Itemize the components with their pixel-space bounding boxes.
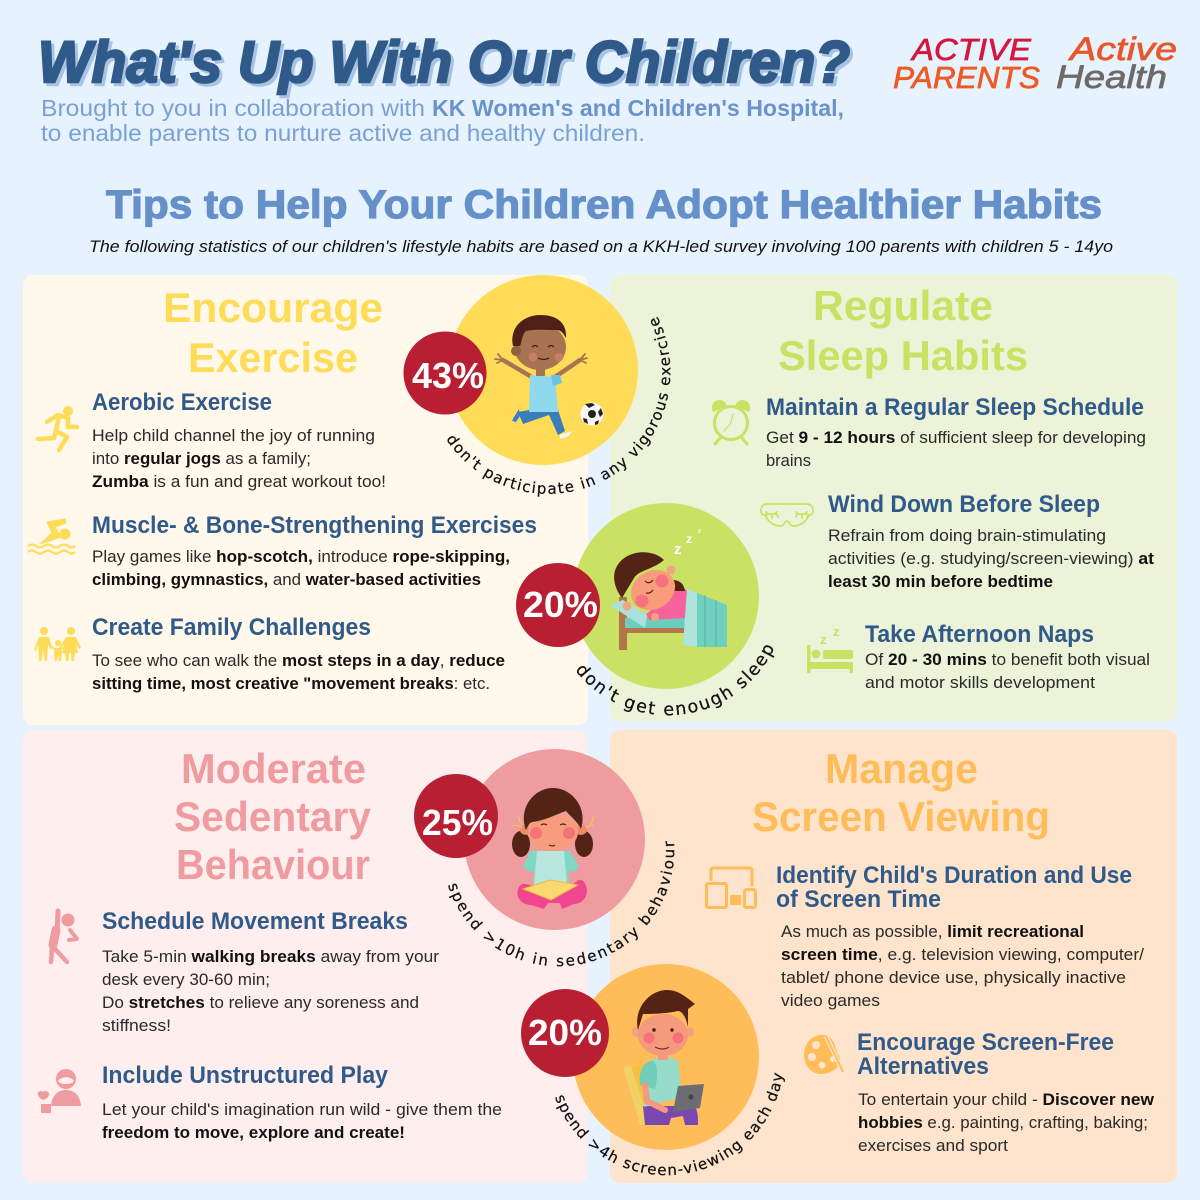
icon: bed: z: [833, 624, 840, 639]
curved caption: sedentary: spend >10h in sedentary behaviour: [448, 841, 674, 966]
tip: screen-free alternatives: Alternatives: [857, 1053, 989, 1080]
logo: Active Parents: ACTIVE: [910, 32, 1031, 67]
tip: afternoon naps: [865, 621, 1150, 692]
icon: z's: z: [698, 529, 701, 535]
stat: sleep: [516, 503, 774, 716]
icon: stretching person: [51, 911, 77, 962]
tip: movement breaks: desk every 30-60 min;: [102, 971, 270, 989]
tip: muscle and bone strengthening: [92, 512, 537, 589]
icon: bed: [807, 624, 853, 673]
tip: screen-free alternatives: Encourage Screen-Free: [857, 1029, 1114, 1056]
title: What's Up With Our Children?: [41, 33, 853, 98]
tip: sleep schedule: brains: [766, 452, 811, 470]
tip: screen-free alternatives: To entertain your child - Discover new: [858, 1091, 1154, 1109]
tip: afternoon naps: and motor skills development: [865, 674, 1095, 692]
tip: wind down: Wind Down Before Sleep: [828, 491, 1100, 518]
illustration: girl reading: [512, 788, 594, 909]
tip: screen-free alternatives: exercises and sport: [858, 1137, 1008, 1155]
heading: encourage exercise: Encourage: [163, 284, 383, 331]
tip: screen-free alternatives: hobbies e.g. painting, crafting, baking;: [858, 1114, 1148, 1132]
logo: Active Health: [1056, 31, 1177, 95]
tip: duration of screen time: of Screen Time: [776, 886, 941, 913]
tip: duration of screen time: screen time , e.g. television viewing, computer/: [781, 946, 1144, 964]
illustration: girl sleeping: [610, 529, 727, 650]
tip: duration of screen time: As much as possible, limit recreational: [781, 923, 1084, 941]
tip: movement breaks: Take 5-min walking breaks away from your: [102, 948, 440, 966]
icon: z's: z: [674, 541, 682, 558]
heading: moderate sedentary behaviour: Behaviour: [176, 841, 370, 888]
heading: encourage exercise: [163, 284, 383, 381]
badge: 20% sleep: [516, 563, 600, 647]
tip: family challenges: Create Family Challenges: [92, 614, 371, 641]
icon: alarm clock: [713, 401, 749, 444]
tip: aerobic exercise: into regular jogs as a family;: [92, 450, 311, 468]
heading: moderate sedentary behaviour: [174, 745, 372, 888]
badge: 20% sleep: 20%: [523, 584, 598, 625]
tip: wind down: least 30 min before bedtime: [828, 573, 1053, 591]
tip: aerobic exercise: Aerobic Exercise: [92, 389, 272, 416]
tip: afternoon naps: Take Afternoon Naps: [865, 621, 1094, 648]
tip: movement breaks: stiffness!: [102, 1017, 171, 1035]
logo: Active Health: Active: [1068, 31, 1177, 67]
tip: screen-free alternatives: [857, 1029, 1154, 1155]
tip: sleep schedule: Get 9 - 12 hours of sufficient sleep for developing: [766, 429, 1146, 447]
panel: encourage exercise: [23, 275, 588, 725]
heading: manage screen viewing: Screen Viewing: [752, 793, 1050, 840]
badge: 43%: 43%: [412, 355, 484, 396]
tip: movement breaks: Schedule Movement Breaks: [102, 908, 408, 935]
logo: Active Health: Health: [1056, 59, 1167, 95]
icon: z's: z: [686, 532, 692, 546]
section heading: Tips to Help Your Children Adopt Healthier Habits: [106, 183, 1102, 227]
heading: regulate sleep habits: Sleep Habits: [778, 332, 1028, 379]
tip: duration of screen time: [776, 862, 1144, 1010]
subtitle: [41, 95, 844, 146]
subtitle: to enable parents to nurture active and healthy children.: [41, 120, 645, 146]
badge: 43%: [404, 332, 486, 414]
tip: unstructured play: Let your child's imagination run wild - give them the: [102, 1101, 502, 1119]
tip: unstructured play: Include Unstructured Play: [102, 1062, 389, 1089]
tip: afternoon naps: Of 20 - 30 mins to benefit both visual: [865, 651, 1150, 669]
icon: swimmer: [28, 519, 75, 554]
illustration: boy with laptop: [623, 990, 704, 1125]
tip: wind down: Refrain from doing brain-stimulating: [828, 527, 1106, 545]
tip: aerobic exercise: Help child channel the joy of running: [92, 427, 375, 445]
logo: Active Parents: PARENTS: [893, 60, 1040, 95]
badge: 25%: 25%: [422, 802, 493, 843]
tip: movement breaks: Do stretches to relieve any soreness and: [102, 994, 419, 1012]
tip: duration of screen time: Identify Child's Duration and Use: [776, 862, 1132, 889]
icon: family: [34, 627, 81, 661]
heading: regulate sleep habits: Regulate: [813, 282, 993, 329]
icon: runner: [38, 406, 77, 450]
title: What's Up With Our Children?: [38, 30, 850, 95]
heading: encourage exercise: Exercise: [188, 334, 358, 381]
tip: muscle and bone strengthening: climbing, gymnastics, and water-based activities: [92, 571, 481, 589]
tip: unstructured play: [102, 1062, 502, 1142]
curved caption: sleep: don't get enough sleep: [576, 645, 774, 716]
panel: manage screen viewing: [610, 730, 1177, 1183]
tip: aerobic exercise: [92, 389, 386, 491]
tip: sleep schedule: [766, 394, 1146, 470]
tip: muscle and bone strengthening: Muscle- & Bone-Strengthening Exercises: [92, 512, 537, 539]
survey note: The following statistics of our children's lifestyle habits are based on a KKH-led survey involving 100 parents with children 5 - 14yo: [89, 237, 1113, 256]
tip: duration of screen time: video games: [781, 992, 880, 1010]
stat: sedentary: [414, 749, 674, 966]
panel: moderate sedentary behaviour: [23, 730, 588, 1183]
logo: Active Parents: [893, 32, 1040, 95]
heading: moderate sedentary behaviour: Sedentary: [174, 793, 372, 840]
subtitle: KK Women's and Children's Hospital,: [432, 95, 844, 121]
tip: duration of screen time: tablet/ phone device use, physically inactive: [781, 969, 1126, 987]
heading: manage screen viewing: [752, 745, 1050, 840]
curved caption: exercise: don't participate in any vigorous exercise: [447, 317, 670, 497]
tip: muscle and bone strengthening: Play games like hop-scotch, introduce rope-skipping,: [92, 548, 510, 566]
tip: movement breaks: [102, 908, 440, 1035]
subtitle: Brought to you in collaboration with: [41, 95, 425, 121]
tip: sleep schedule: Maintain a Regular Sleep Schedule: [766, 394, 1144, 421]
curved caption: screen: spend >4h screen-viewing each day: [555, 1072, 785, 1176]
panel: regulate sleep habits: [610, 275, 1177, 721]
tip: wind down: [828, 491, 1155, 591]
tip: aerobic exercise: Zumba is a fun and great workout too!: [92, 473, 386, 491]
tip: family challenges: sitting time, most creative "movement breaks : etc.: [92, 675, 490, 693]
icon: screen devices: [706, 868, 756, 908]
tip: unstructured play: freedom to move, explore and create!: [102, 1124, 405, 1142]
icon: sleep mask: [761, 504, 813, 526]
tip: family challenges: [92, 614, 505, 693]
icon: bed: z: [820, 632, 827, 647]
stat: exercise: [404, 275, 670, 497]
badge: 20% screen: 20%: [528, 1012, 602, 1053]
tip: wind down: activities (e.g. studying/screen-viewing) at: [828, 550, 1155, 568]
icon: z's: [674, 529, 701, 558]
tip: family challenges: To see who can walk the most steps in a day , reduce: [92, 652, 505, 670]
badge: 25%: [414, 774, 498, 858]
stat: screen: [521, 964, 785, 1176]
illustration: boy playing football: [495, 315, 604, 439]
heading: regulate sleep habits: [778, 282, 1028, 379]
icon: paint palette: [804, 1035, 843, 1074]
icon: child with toys: [38, 1069, 81, 1113]
heading: manage screen viewing: Manage: [825, 745, 978, 792]
badge: 20% screen: [521, 989, 609, 1077]
heading: moderate sedentary behaviour: Moderate: [181, 745, 366, 792]
